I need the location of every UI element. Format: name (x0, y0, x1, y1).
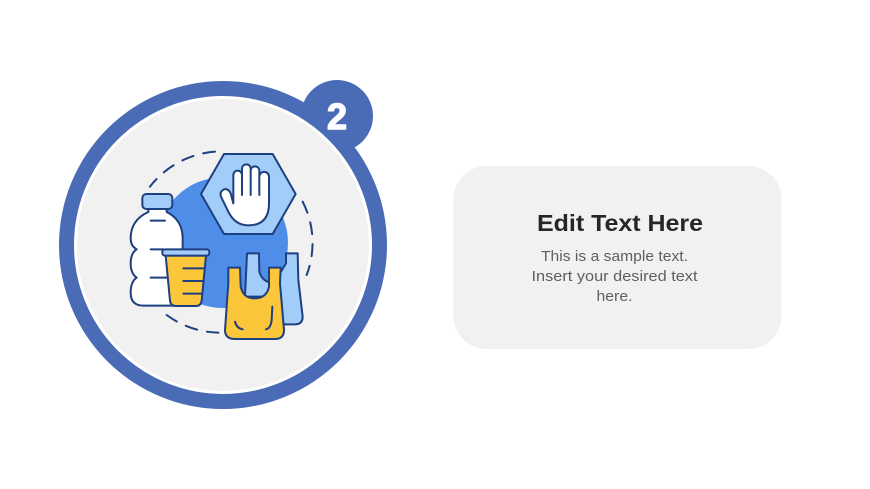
card background (454, 166, 782, 349)
outer blue ring (59, 81, 387, 409)
number badge: 2 (327, 96, 347, 137)
panel: text card (454, 166, 782, 349)
blue circle backdrop (157, 177, 288, 308)
card body text: Insert your desired text (532, 268, 698, 285)
icon: yellow plastic bag (225, 268, 284, 339)
dashed orbit (150, 152, 313, 333)
numbered circle panel (59, 80, 387, 409)
inner white ring with grey disc (76, 98, 370, 392)
plastic ban illustration (131, 152, 313, 339)
icon: stop hexagon (201, 154, 296, 234)
card body text (532, 248, 698, 305)
number badge (301, 80, 373, 152)
icon: raised hand (221, 164, 269, 225)
card body text: This is a sample text. (541, 248, 688, 265)
card heading: Edit Text Here (537, 210, 703, 236)
icon: back plastic bag (277, 253, 303, 324)
icon: bag inner handle (245, 253, 269, 297)
card body text: here. (596, 288, 632, 305)
icon: measuring cup (162, 249, 209, 306)
icon: plastic bottle (131, 194, 183, 306)
